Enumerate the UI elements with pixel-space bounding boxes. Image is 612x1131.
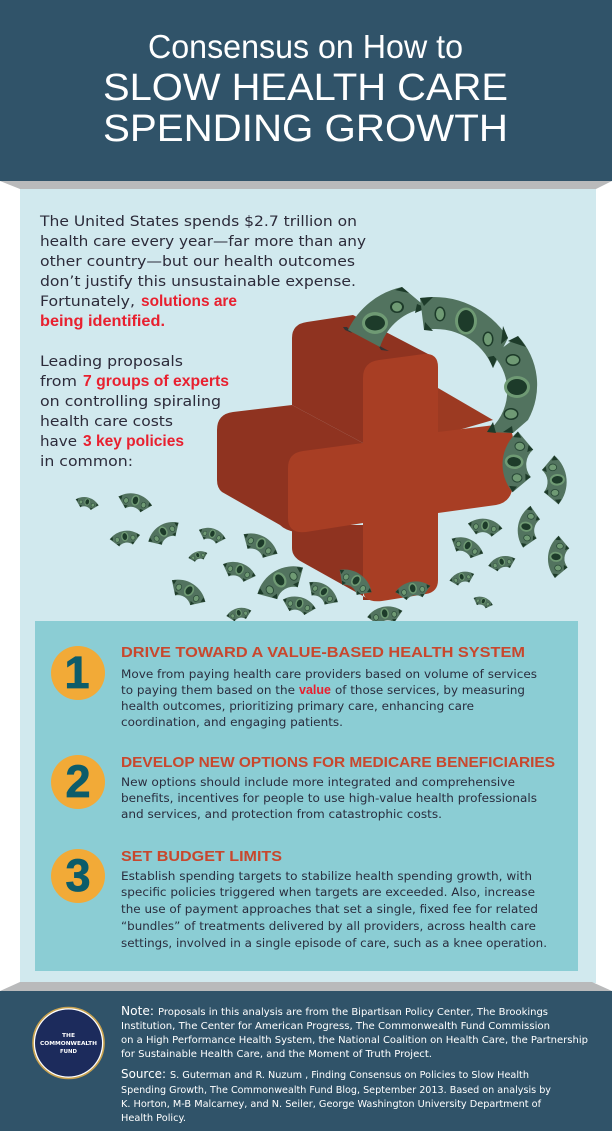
- coin slot: [343, 327, 389, 351]
- note text: for Sustainable Health Care, and the Moment of Truth Project.: [121, 1049, 432, 1060]
- policy 1 text: [121, 668, 537, 729]
- flying money bills: [74, 430, 570, 627]
- policy 3 text: [121, 870, 547, 950]
- logo: The Commonwealth Fund: THE: [62, 1033, 76, 1039]
- intro text: being identified.: [40, 313, 165, 330]
- policy 1 text: health outcomes, prioritizing primary care, enhancing care: [121, 700, 474, 713]
- source text: [121, 1066, 551, 1124]
- note text: [121, 1003, 588, 1060]
- intro text: Leading proposals: [40, 354, 183, 370]
- intro text: other country—but our health outcomes: [40, 254, 355, 270]
- header banner: [0, 0, 612, 189]
- number badge 2: 2: [65, 756, 91, 807]
- red cross illustration: [217, 315, 513, 601]
- policy 1 text: coordination, and engaging patients.: [121, 716, 343, 729]
- policy 3: [51, 848, 547, 950]
- policy 3 text: settings, involved in a single episode of care, such as a knee operation.: [121, 937, 547, 950]
- policy 2: [51, 754, 555, 821]
- policy 2 text: benefits, incentives for people to use high-value health professionals: [121, 792, 537, 805]
- policy 2 text: New options should include more integrated and comprehensive: [121, 776, 515, 789]
- title: SPENDING GROWTH: [103, 108, 508, 150]
- note text: Institution, The Center for American Progress, The Commonwealth Fund Commission: [121, 1021, 550, 1032]
- title: Consensus on How to: [148, 28, 463, 65]
- policy 1: [51, 644, 537, 729]
- intro text: health care every year—far more than any: [40, 234, 366, 250]
- note text: Note:: [121, 1003, 154, 1018]
- background panel: [20, 188, 596, 983]
- intro text: 3 key policies: [83, 433, 184, 450]
- intro text: have: [40, 434, 77, 450]
- logo: The Commonwealth Fund: [32, 1007, 104, 1079]
- logo: The Commonwealth Fund: FUND: [60, 1049, 77, 1055]
- intro text: [39, 214, 366, 470]
- policy 1 text: Move from paying health care providers based on volume of services: [121, 668, 537, 681]
- intro text: The United States spends $2.7 trillion on: [39, 214, 357, 230]
- source text: K. Horton, M-B Malcarney, and N. Seiler, George Washington University Department of: [121, 1099, 542, 1110]
- footer: [0, 982, 612, 1131]
- intro text: on controlling spiraling: [40, 394, 221, 410]
- policy 2 heading: DEVELOP NEW OPTIONS FOR MEDICARE BENEFICIARIES: [121, 754, 555, 771]
- number badge 3: [51, 849, 105, 903]
- note text: Proposals in this analysis are from the Bipartisan Policy Center, The Brookings: [158, 1007, 548, 1018]
- policy 1 heading: DRIVE TOWARD A VALUE-BASED HEALTH SYSTEM: [121, 644, 525, 661]
- source text: Health Policy.: [121, 1113, 186, 1124]
- note text: on a High Performance Health System, the National Coalition on Health Care, the Partnership: [121, 1035, 588, 1046]
- money arc entering slot: [348, 287, 537, 433]
- logo: The Commonwealth Fund: COMMONWEALTH: [40, 1041, 97, 1047]
- intro text: 7 groups of experts: [83, 373, 229, 390]
- source text: S. Guterman and R. Nuzum , Finding Consensus on Policies to Slow Health: [170, 1070, 529, 1081]
- number badge 2: [51, 755, 105, 809]
- policy 2 text: [121, 776, 537, 821]
- title: SLOW HEALTH CARE: [103, 67, 508, 109]
- number badge 1: 1: [64, 647, 90, 698]
- source text: Spending Growth, The Commonwealth Fund Blog, September 2013. Based on analysis by: [121, 1085, 551, 1096]
- title: [103, 28, 508, 150]
- intro text: health care costs: [40, 414, 173, 430]
- policy 1 text: value: [299, 683, 331, 697]
- intro text: from: [40, 374, 77, 390]
- policy 3 text: Establish spending targets to stabilize health spending growth, with: [121, 870, 532, 883]
- policy 3 text: specific policies triggered when targets are exceeded. Also, increase: [121, 886, 535, 899]
- source text: Source:: [121, 1066, 166, 1081]
- number badge 1: [51, 646, 105, 700]
- policy 3 heading: SET BUDGET LIMITS: [121, 848, 282, 865]
- intro text: in common:: [40, 454, 133, 470]
- policy 3 text: “bundles” of treatments delivered by all providers, across health care: [121, 920, 536, 933]
- intro text: Fortunately,: [40, 294, 135, 310]
- number badge 3: 3: [65, 850, 91, 901]
- policy 1 text: to paying them based on the: [121, 684, 295, 697]
- intro text: solutions are: [141, 293, 237, 310]
- panel: key policies: [35, 621, 578, 971]
- policy 1 text: of those services, by measuring: [335, 684, 525, 697]
- intro text: don’t justify this unsustainable expense.: [40, 274, 356, 290]
- policy 2 text: and services, and protection from catastrophic costs.: [121, 808, 442, 821]
- policy 3 text: the use of payment approaches that set a single, fixed fee for related: [121, 903, 538, 916]
